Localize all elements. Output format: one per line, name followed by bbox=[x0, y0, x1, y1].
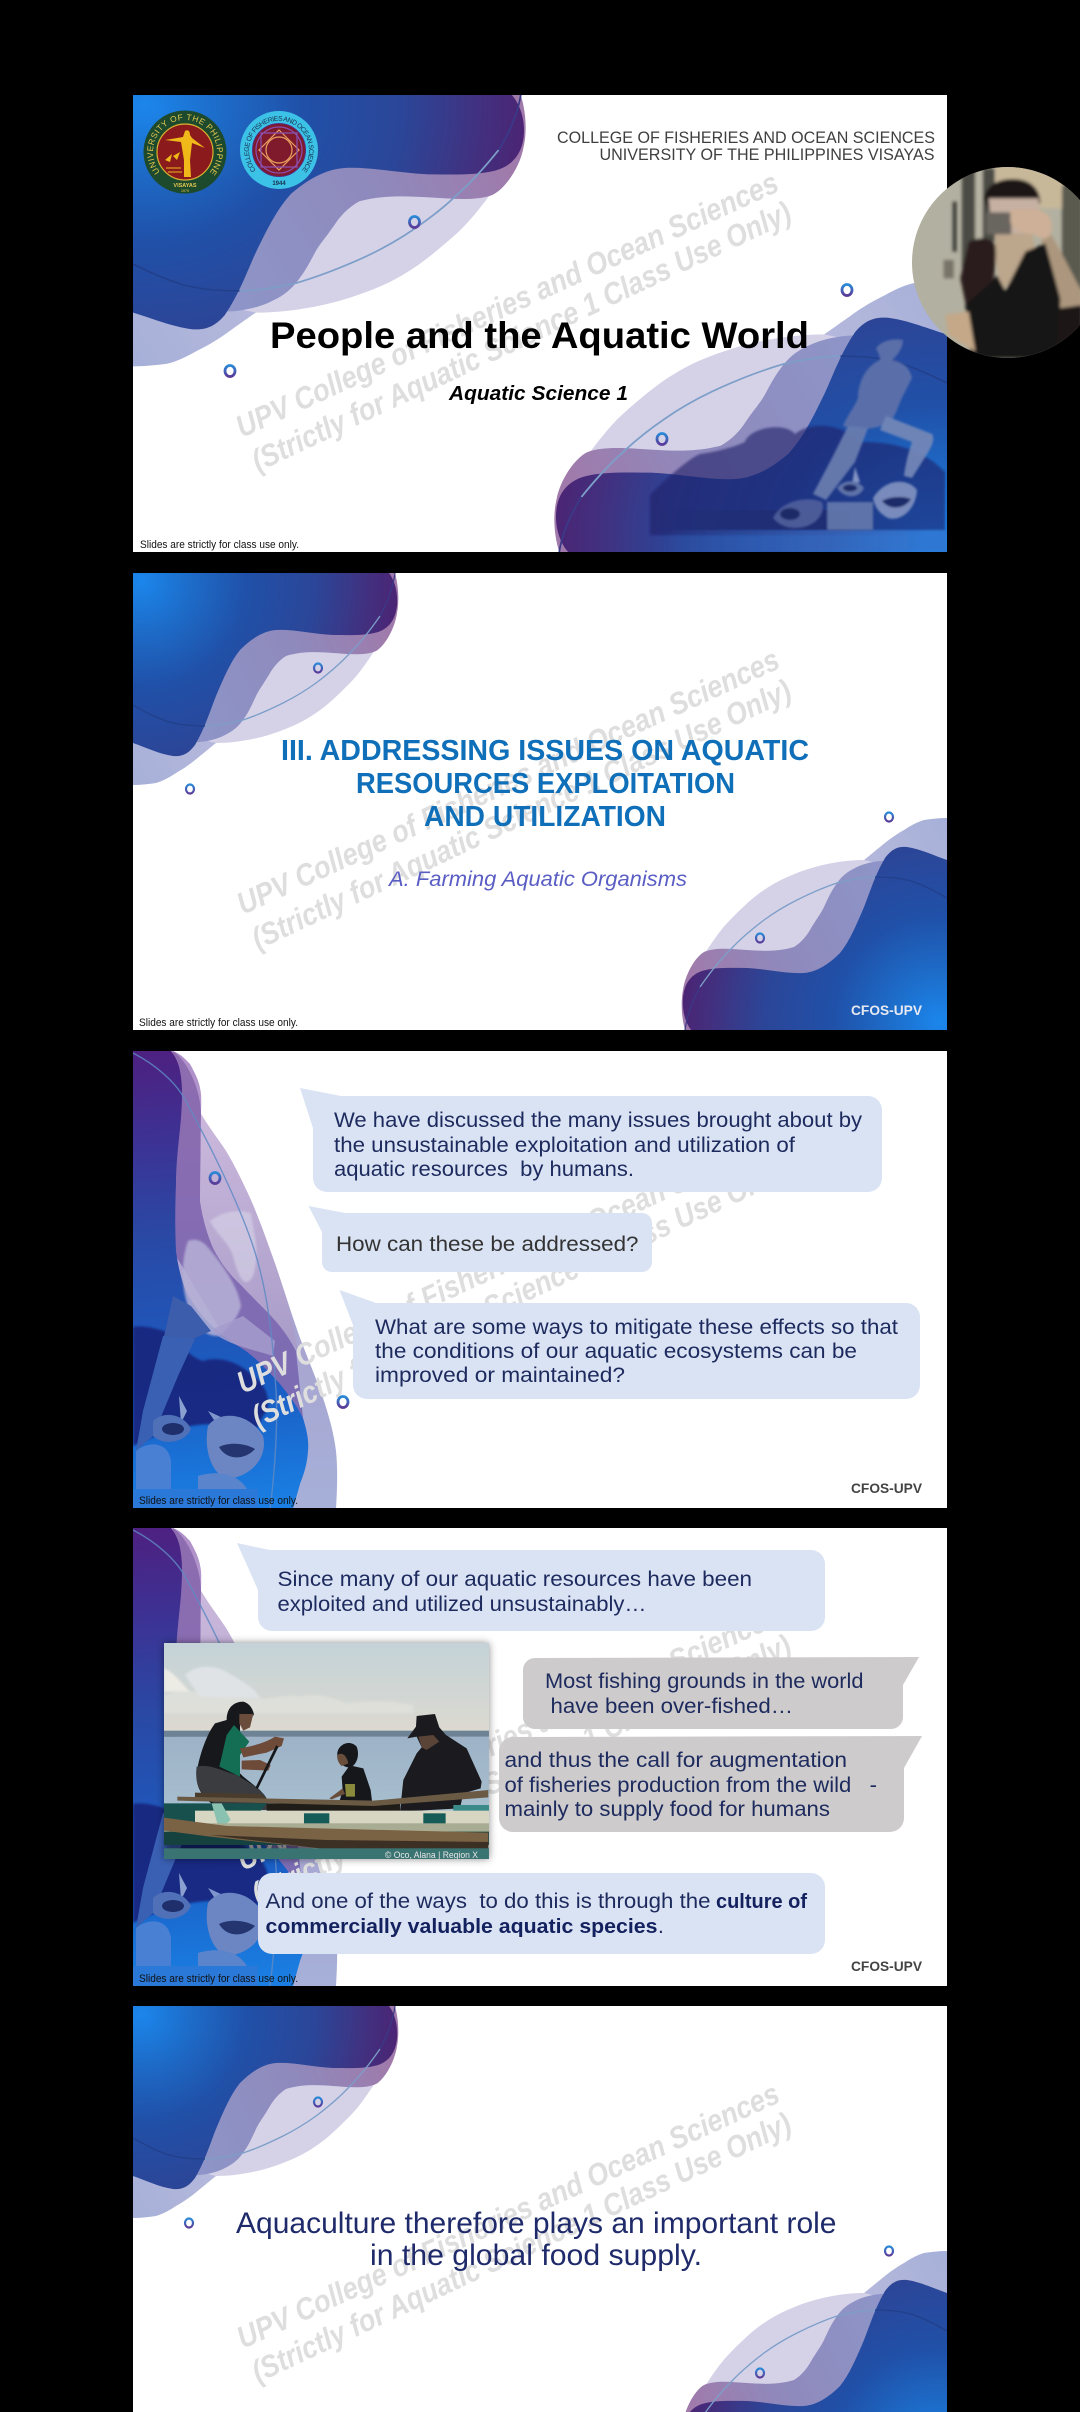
speech bubble: culture of species: commercially valuable aquatic species bbox=[266, 1915, 658, 1938]
college heading: UNIVERSITY OF THE PHILIPPINES VISAYAS bbox=[600, 146, 934, 164]
watermark: UPV College of Fisheries and Ocean Sciences bbox=[231, 1121, 785, 1400]
watermark: UPV College of Fisheries and Ocean Sciences bbox=[231, 642, 785, 921]
speech bubble: mitigation: the conditions of our aquatic ecosystems can be bbox=[375, 1340, 857, 1363]
slide 3: discussion questions bbox=[133, 1051, 947, 1509]
decorative rings bbox=[225, 216, 852, 444]
slide 1: title slide bbox=[133, 95, 947, 552]
decorative rings bbox=[210, 1172, 348, 1408]
speech bubble: culture of species: culture of bbox=[716, 1890, 807, 1913]
slide 5 background bbox=[133, 2006, 947, 2412]
speech bubble: how addressed: How can these be addressed? bbox=[336, 1233, 638, 1256]
section heading: III. ADDRESSING ISSUES ON AQUATIC bbox=[281, 735, 809, 767]
watermark: UPV College of Fisheries and Ocean Sciences bbox=[231, 1598, 785, 1877]
slide 2: section heading bbox=[133, 573, 947, 1030]
sea bbox=[164, 1737, 489, 1817]
speech bubble: over-fished: have been over-fished… bbox=[550, 1695, 793, 1718]
decorative wave bottom right bbox=[682, 818, 947, 1030]
webcam presenter overlay bbox=[912, 165, 1080, 360]
subheading: A. Farming Aquatic Organisms bbox=[387, 868, 688, 891]
section heading bbox=[282, 740, 808, 826]
speech bubble: issues discussed: We have discussed the many issues brought about by bbox=[334, 1109, 863, 1132]
speech bubble: mitigation: What are some ways to mitigate these effects so that bbox=[375, 1316, 898, 1339]
watermark: (Strictly for Aquatic Science 1 Class Use Only) bbox=[246, 195, 797, 478]
footer tag: CFOS-UPV bbox=[851, 1480, 923, 1496]
speech bubble: issues discussed: aquatic resources by humans. bbox=[334, 1158, 634, 1181]
watermark bbox=[238, 1192, 754, 1433]
decorative rings bbox=[185, 2098, 893, 2378]
speech bubble: unsustainable use: exploited and utilized unsustainably… bbox=[278, 1593, 646, 1616]
watermark: (Strictly for Aquatic Science 1 Class Use Only) bbox=[246, 673, 797, 956]
statue photo overlay bbox=[650, 339, 947, 552]
footer note: Slides are strictly for class use only. bbox=[139, 1973, 298, 1985]
subtitle: Aquatic Science 1 bbox=[448, 383, 628, 405]
photo: family fishing on a boat bbox=[164, 1643, 489, 1860]
icon: UP Visayas seal bbox=[144, 110, 226, 194]
footer note: Slides are strictly for class use only. bbox=[139, 1495, 298, 1507]
speech bubble: over-fished bbox=[523, 1657, 919, 1729]
speech bubble: augmentation: and thus the call for augmentation bbox=[504, 1749, 847, 1772]
statement text bbox=[236, 2207, 836, 2272]
woman paddling bbox=[196, 1702, 284, 1810]
slide 1 background bbox=[133, 95, 947, 552]
speech bubble: how addressed bbox=[308, 1206, 652, 1272]
photo credit: © Oco, Alana | Region X bbox=[385, 1850, 478, 1860]
footer tag: CFOS-UPV bbox=[851, 1958, 923, 1974]
speech bubble: unsustainable use: Since many of our aquatic resources have been bbox=[278, 1568, 752, 1591]
college heading bbox=[558, 132, 934, 160]
speech bubble: mitigation: improved or maintained? bbox=[375, 1364, 625, 1387]
clouds bbox=[164, 1667, 413, 1713]
watermark: (Strictly for Aquatic Science 1 Class Use Only) bbox=[246, 1151, 797, 1434]
speech bubble: over-fished: Most fishing grounds in the world bbox=[545, 1670, 864, 1693]
watermark: (Strictly for Aquatic Science 1 Class Use Only) bbox=[246, 1628, 797, 1911]
decorative rings bbox=[186, 664, 893, 942]
left statue panel bbox=[133, 1528, 337, 1986]
speech bubble: culture of species: . bbox=[658, 1915, 664, 1938]
statement text: Aquaculture therefore plays an important role bbox=[236, 2207, 836, 2240]
speech bubble: mitigation bbox=[340, 1290, 920, 1399]
decorative wave bottom right bbox=[554, 281, 947, 552]
speech bubble: augmentation: mainly to supply food for humans bbox=[504, 1798, 830, 1821]
section heading: AND UTILIZATION bbox=[424, 801, 666, 833]
section heading: RESOURCES EXPLOITATION bbox=[356, 768, 735, 800]
speech bubble: augmentation: of fisheries production from the wild - bbox=[504, 1774, 877, 1797]
icon: UP Visayas seal: VISAYAS bbox=[173, 183, 197, 189]
statement text: in the global food supply. bbox=[370, 2239, 702, 2272]
speech bubble: issues discussed: the unsustainable exploitation and utilization of bbox=[334, 1134, 795, 1157]
decorative wave top left bbox=[133, 573, 398, 785]
watermark: UPV College of Fisheries and Ocean Sciences bbox=[230, 165, 784, 444]
watermark: (Strictly for Aquatic Science 1 Class Use Only) bbox=[246, 2106, 797, 2389]
speech bubble: culture of species bbox=[258, 1873, 825, 1954]
left statue panel bbox=[133, 1051, 337, 1509]
decorative wave top left bbox=[133, 95, 526, 366]
photo shadow bbox=[164, 1643, 489, 1859]
icon: College of Fisheries seal: 1944 bbox=[272, 181, 286, 187]
slide 4 background bbox=[133, 1528, 947, 1986]
child bbox=[329, 1743, 373, 1812]
speech bubble: culture of species: And one of the ways to do this is through the bbox=[266, 1890, 710, 1913]
decorative wave bottom right bbox=[682, 2251, 947, 2412]
slide 3 background bbox=[133, 1051, 947, 1508]
icon: College of Fisheries seal bbox=[240, 111, 318, 189]
footer note: Slides are strictly for class use only. bbox=[140, 539, 299, 551]
horizon bbox=[164, 1731, 489, 1737]
blurred presenter bbox=[944, 165, 1080, 358]
footer tag: CFOS-UPV bbox=[851, 1002, 923, 1018]
speech bubble: issues discussed bbox=[300, 1088, 882, 1192]
college heading: COLLEGE OF FISHERIES AND OCEAN SCIENCES bbox=[557, 129, 935, 147]
watermark: UPV College of Fisheries and Ocean Sciences bbox=[231, 2076, 785, 2355]
speech bubble: augmentation bbox=[499, 1736, 922, 1832]
slide 5: aquaculture statement bbox=[133, 2006, 947, 2412]
title: People and the Aquatic World bbox=[270, 315, 809, 356]
boat outrigger and hull bbox=[164, 1790, 489, 1860]
speech bubble: unsustainable use bbox=[237, 1543, 825, 1631]
man with cap bbox=[400, 1714, 482, 1812]
icon: UP Visayas seal: 1979 bbox=[181, 189, 189, 193]
slide 4: overfishing and culture bbox=[133, 1528, 947, 1986]
footer note: Slides are strictly for class use only. bbox=[139, 1017, 298, 1029]
decorative wave top left bbox=[133, 2006, 398, 2218]
webcam background bbox=[912, 165, 1080, 360]
slide 2 background bbox=[133, 573, 947, 1030]
